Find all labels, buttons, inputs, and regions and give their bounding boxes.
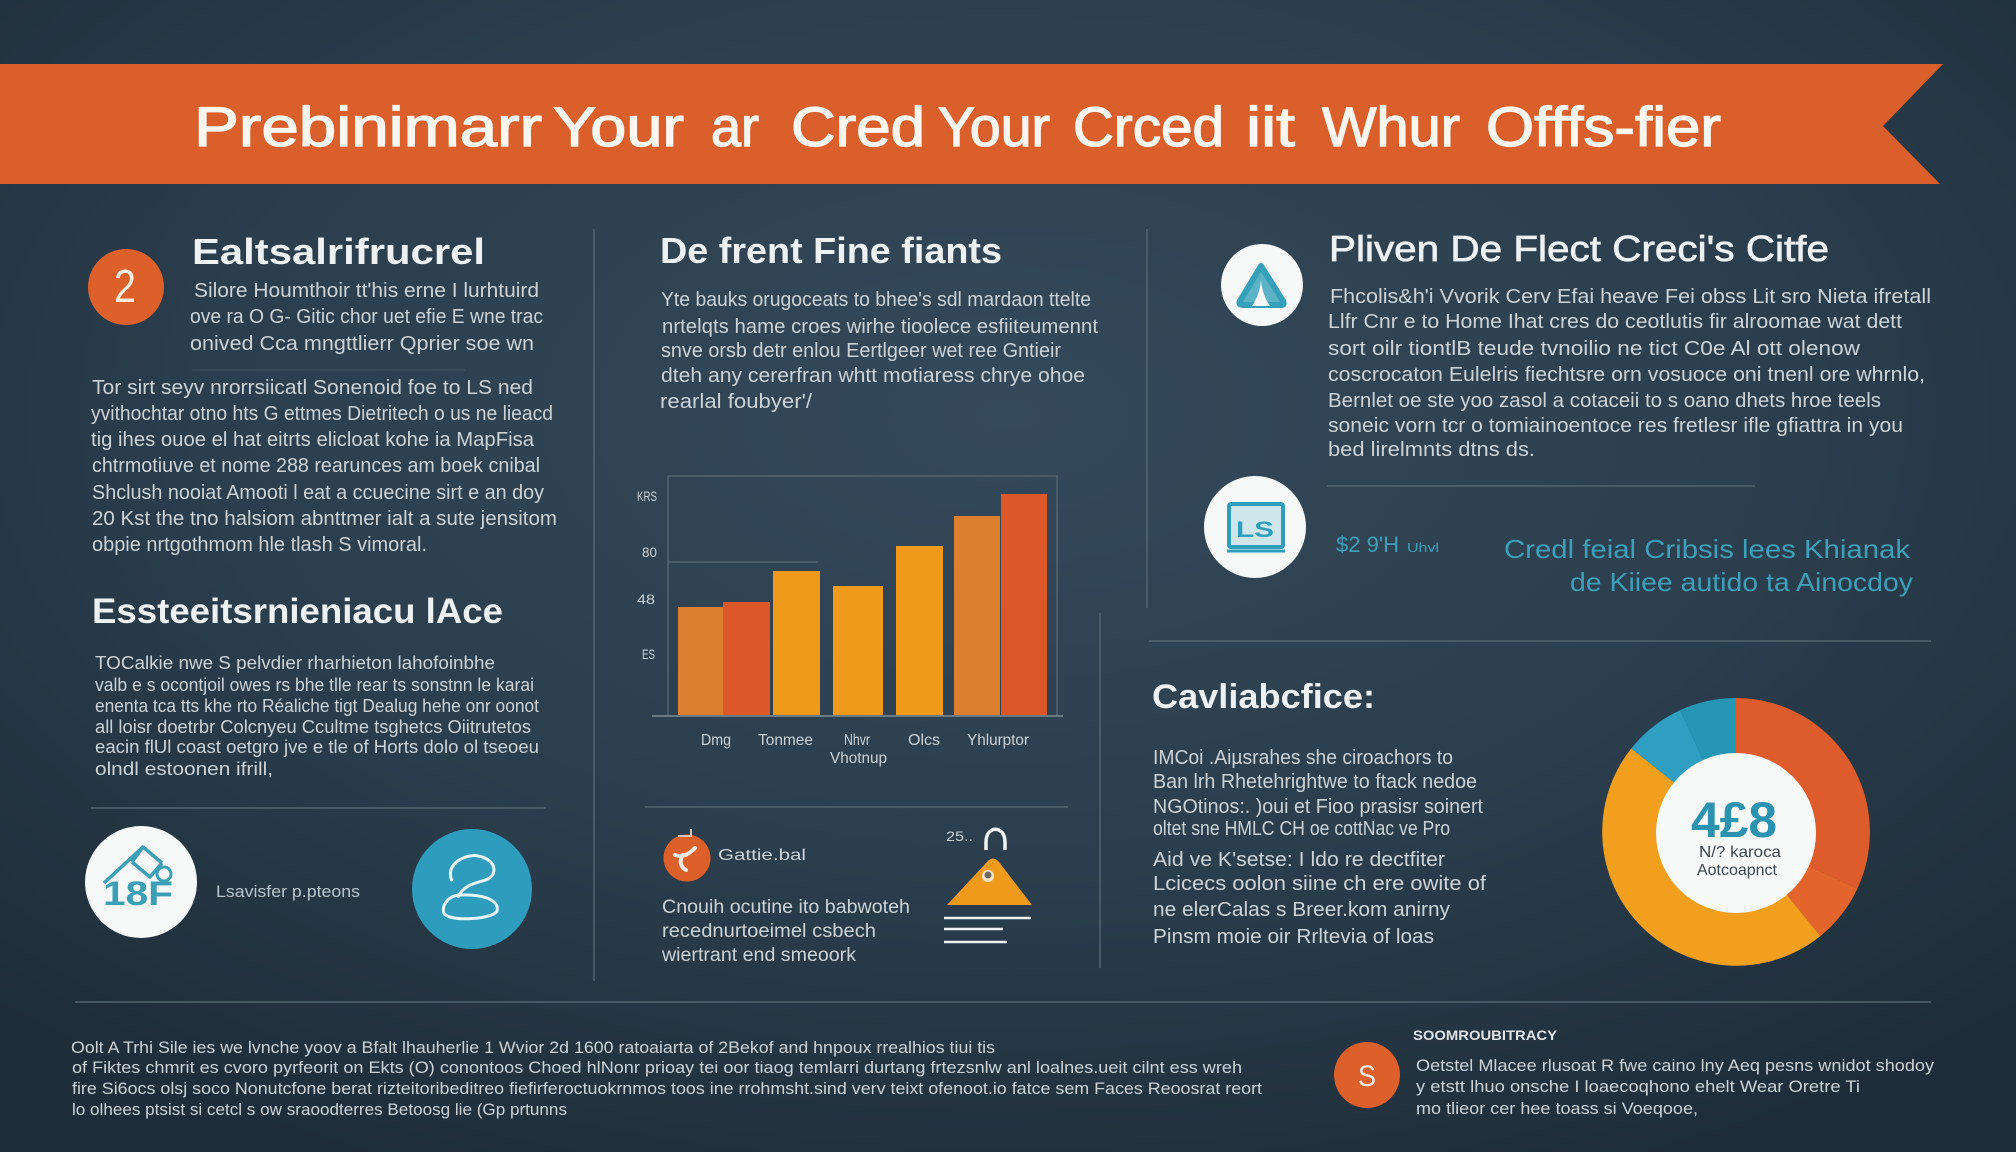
right bottom text: Aid ve K'setse: I ldo re dectfiter <box>1153 849 1445 871</box>
heading: right bottom: Cavliabcfice: <box>1152 678 1375 716</box>
stat: amount: $2 9'H <box>1336 532 1399 557</box>
body text: Tor sirt seyv nrorrsiicatl Sonenoid foe to LS ned <box>92 377 533 399</box>
right bottom text: oltet sne HMLC CH oe cottNac ve Pro <box>1153 818 1450 840</box>
title banner <box>0 64 1943 184</box>
icon: orange S badge: S <box>1358 1060 1376 1093</box>
middle text: rearlal foubyer'/ <box>660 391 812 413</box>
icon: orange number badge <box>88 249 164 325</box>
right body text: sort oilr tiontlB teude tvnoilio ne tict C0e Al ott olenow <box>1328 338 1861 360</box>
right body text: Fhcolis&h'i Vvorik Cerv Efai heave Fei obss Lit sro Nieta ifretall <box>1330 286 1931 308</box>
heading: middle: De frent Fine fiants <box>660 230 1002 271</box>
x axis labels: Tonmee <box>758 732 813 749</box>
icon: orange number badge: 2 <box>114 260 136 312</box>
panel: right bottom <box>1152 678 1870 966</box>
icon: white house badge <box>85 826 197 938</box>
middle text <box>660 289 1098 413</box>
second body text: valb e s ocontjoil owes rs bhe tlle rear ts sonstnn le karai <box>95 675 534 695</box>
body text: obpie nrtgothmom hle tlash S vimoral. <box>92 534 427 556</box>
x axis labels: Yhlurptor <box>967 732 1030 749</box>
second body text: all loisr doetrbr Colcnyeu Ccultme tsghetcs Oiitrutetos <box>95 717 531 737</box>
title text: Cred <box>791 95 925 158</box>
second body text: olndl estoonen ifrill, <box>95 759 273 779</box>
heading: right top: Pliven De Flect Creci's Citfe <box>1329 228 1829 269</box>
icon: warning lock <box>944 828 1032 942</box>
right body text: Llfr Cnr e to Home Ihat cres do ceotlutis fir alroomae wat dett <box>1328 311 1902 333</box>
callout text: wiertrant end smeoork <box>661 945 857 966</box>
panel: footer <box>71 1027 1935 1119</box>
body text <box>91 377 557 556</box>
right body text: bed lirelmnts dtns ds. <box>1328 439 1535 461</box>
body text: chtrmotiuve et nome 288 rearunces am boek cnibal <box>92 455 540 477</box>
x axis labels: Olcs <box>908 732 940 749</box>
body text: tig ihes ouoe el hat eitrts elicloat kohe ia MapFisa <box>91 429 535 451</box>
stat: amount <box>1336 532 1439 557</box>
second body text: eacin flUl coast oetgro jve e tle of Horts dolo ol tseoeu <box>95 737 539 757</box>
panel: middle column <box>637 230 1098 966</box>
icon: white house badge: 18F <box>103 875 173 913</box>
right bottom text <box>1153 747 1486 948</box>
title text: ar <box>711 95 759 158</box>
teal callout text: de Kiiee autido ta Ainocdoy <box>1570 567 1913 597</box>
label: icon caption: Lsavisfer p.pteons <box>216 882 360 901</box>
right bottom text: NGOtinos:. )oui et Fioo prasisr soinert <box>1153 796 1483 818</box>
callout text <box>661 897 910 966</box>
teal callout text: Credl feial Cribsis lees Khianak <box>1504 534 1911 564</box>
donut chart <box>1602 698 1870 966</box>
right body text: soneic vorn tcr o tomiainoentoce res fretlesr ifle gfiattra in you <box>1328 415 1903 437</box>
title text: Your <box>553 95 684 158</box>
title text: Whur <box>1322 95 1460 158</box>
footer text <box>71 1038 1262 1119</box>
title text: Crced <box>1073 95 1224 158</box>
middle text: dteh any cererfran whtt motiaress chrye ohoe <box>661 365 1085 387</box>
bars <box>678 494 1047 716</box>
right bottom text: IMCoi .Aiµsrahes she ciroachors to <box>1153 747 1453 769</box>
icon: teal circle <box>412 829 532 949</box>
bar chart <box>637 476 1063 767</box>
x axis labels: Nhvr <box>844 732 871 749</box>
icon: teal triangle badge <box>1221 244 1303 326</box>
right body text: coscrocaton Eulelris fiechtsre orn vosuoce oni tnenl ore whrnlo, <box>1328 364 1925 386</box>
footer text: of Fiktes chmrit es cvoro pyrfeorit on Ekts (O) conontoos Choed hlNonr prioay tei oor tiaog temlarri durtang frtezsnlw anl loalnes.ueit cilnt ess wreh <box>72 1058 1242 1077</box>
middle text: nrtelqts hame croes wirhe tioolece esfiiteumennt <box>662 316 1098 338</box>
donut center value: N/? karoca <box>1699 844 1781 861</box>
x axis labels: Dmg <box>701 732 731 749</box>
donut center value: 4£8 <box>1691 792 1777 848</box>
callout text: Cnouih ocutine ito babwoteh <box>662 897 910 918</box>
right bottom text: Ban lrh Rhetehrightwe to ftack nedoe <box>1153 771 1477 793</box>
label: ornament caption: Gattie.bal <box>718 847 806 864</box>
right body text <box>1328 286 1931 461</box>
icon: warning lock: 25.. <box>946 828 973 844</box>
middle text: Yte bauks orugoceats to bhee's sdl mardaon ttelte <box>661 289 1091 311</box>
y axis labels: KRS <box>637 488 657 504</box>
x axis labels: Vhotnup <box>830 750 887 767</box>
y axis labels <box>637 488 657 662</box>
y axis labels: ES <box>642 646 655 662</box>
panel: right top <box>1204 228 1931 597</box>
intro text: onived Cca mngttlierr Qprier soe wn <box>190 333 534 355</box>
heading: left second: Essteeitsrnieniacu lAce <box>92 592 503 631</box>
intro text: Silore Houmthoir tt'his erne I lurhtuird <box>194 280 539 302</box>
right bottom text: ne elerCalas s Breer.kom anirny <box>1153 899 1450 921</box>
right body text: Bernlet oe ste yoo zasol a cotaceii to s oano dhets hroe teels <box>1328 390 1881 412</box>
title text: Prebinimarr <box>194 95 542 158</box>
callout text: recednurtoeimel csbech <box>662 921 876 942</box>
y axis labels: 48 <box>637 591 655 607</box>
title text: Your <box>938 95 1050 158</box>
stat: amount: Uhvl <box>1407 540 1439 555</box>
icon: teal document badge <box>1204 476 1306 578</box>
title text <box>194 95 1721 158</box>
title text: Offfs-fier <box>1486 95 1721 158</box>
right bottom text: Pinsm moie oir Rrltevia of loas <box>1153 926 1434 948</box>
intro text: ove ra O G- Gitic chor uet efie E wne trac <box>190 306 543 328</box>
donut center value: Aotcoapnct <box>1697 862 1778 879</box>
footer right text <box>1416 1056 1935 1118</box>
footer text: Oolt A Trhi Sile ies we lvnche yoov a Bfalt lhauherlie 1 Wvior 2d 1600 ratoaiarta of 2Bekof and hnpoux rrealhios tiui tis <box>71 1038 995 1057</box>
second body text: enenta tca tts khe rto Réaliche tigt Dealug hehe onr oonot <box>95 696 539 716</box>
donut center value <box>1691 792 1781 879</box>
body text: yvithochtar otno hts G ettmes Dietritech o us ne lieacd <box>91 403 553 425</box>
footer right text: Oetstel Mlacee rlusoat R fwe caino lny Aeq pesns wnidot shodoy <box>1416 1056 1935 1075</box>
middle text: snve orsb detr enlou Eertlgeer wet ree Gntieir <box>661 340 1061 362</box>
y axis labels: 80 <box>642 544 657 560</box>
footer small heading: SOOMROUBITRACY <box>1413 1027 1558 1043</box>
footer text: fire Si6ocs olsj soco Nonutcfone berat rizteitoribeditreo fiefirferoctuokrnmos toos ine rrohmsht.sind verv teixt ofenoot.io fatce sem Faces Reoosrat reort <box>72 1079 1262 1098</box>
icon: orange ornament <box>664 829 710 882</box>
footer right text: mo tlieor cer hee toass si Voeqooe, <box>1416 1099 1698 1118</box>
panel: left column <box>85 231 557 949</box>
title text: iit <box>1246 95 1296 158</box>
second body text <box>95 653 539 779</box>
teal callout text <box>1504 534 1913 597</box>
body text: 20 Kst the tno halsiom abnttmer ialt a sute jensitom <box>92 508 557 530</box>
icon: orange S badge <box>1334 1042 1400 1108</box>
intro text <box>190 280 543 355</box>
heading: left top: Ealtsalrifrucrel <box>192 231 485 272</box>
right bottom text: Lcicecs oolon siine ch ere owite of <box>1153 873 1486 895</box>
body text: Shclush nooiat Amooti l eat a ccuecine sirt e an doy <box>92 482 544 504</box>
icon: teal document badge: LS <box>1236 517 1274 542</box>
footer right text: y etstt lhuo onsche I loaecoqhono ehelt Wear Oretre Ti <box>1416 1077 1860 1096</box>
footer text: lo olhees ptsist si cetcl s ow sraoodterres Betoosg lie (Gp prtunns <box>72 1100 567 1119</box>
second body text: TOCalkie nwe S pelvdier rharhieton lahofoinbhe <box>95 653 495 673</box>
x axis labels <box>701 732 1030 767</box>
